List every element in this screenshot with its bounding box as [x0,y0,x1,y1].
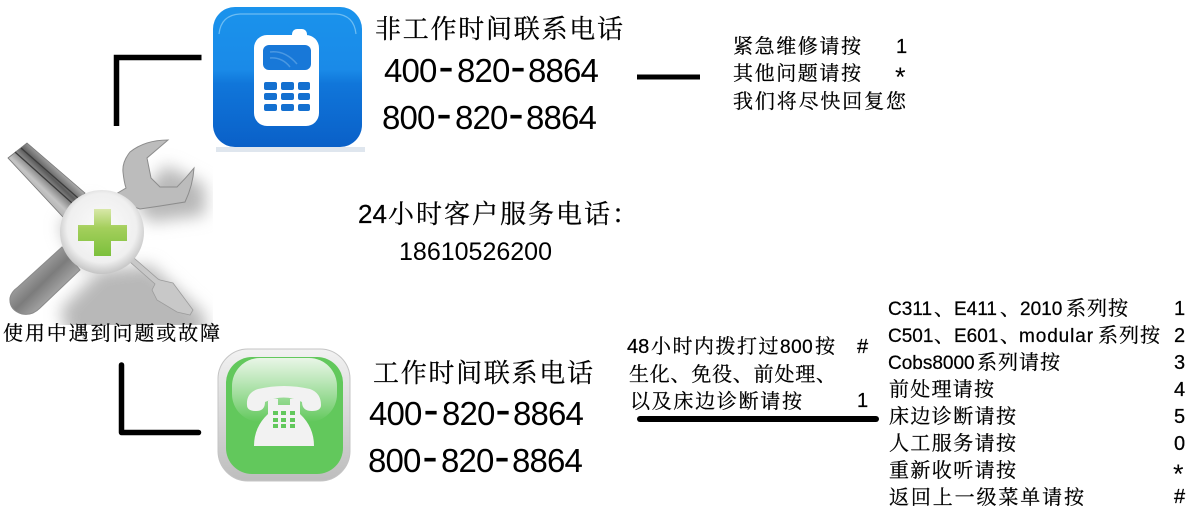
block: working-hours second menu: 、 [1000,325,1020,347]
block: working-hours second menu: 前处理请按 [889,378,995,401]
block: working-hours second menu: modular [1019,326,1094,347]
block: working-hours second menu: 5 [1174,406,1185,428]
block: working-hours first menu [627,335,869,413]
block: working-hours second menu: # [1174,486,1186,508]
block: 24-hour service hotline: 小时客户服务电话： [388,199,640,229]
block: working-hours second menu: 、 [934,298,954,320]
block: working-hours first menu: 小时内拨打过 [651,335,780,358]
block: working-hours second menu: 、 [934,325,954,347]
block: working-hours second menu: E411 [954,299,997,320]
block: working-hours first menu: 按 [815,335,836,358]
block: working-hours second menu: * [1173,459,1184,489]
block: working-hours second menu: C501 [888,326,933,347]
icon: blue mobile phone [213,7,365,152]
block: working-hours second menu: 2010 [1020,299,1062,320]
block: working-hours phone numbers: 800-820-8864 [368,430,583,482]
block: working-hours first menu: 1 [857,390,868,412]
block: after-hours menu: * [895,62,906,92]
block: working-hours second menu [888,297,1186,509]
icon: tools with green plus [8,140,205,340]
connector: bottom-right line [640,416,876,422]
block: working-hours second menu: 1 [1174,298,1185,320]
block: after-hours menu: 我们将尽快回复您 [733,90,907,113]
block: working-hours second menu: 0 [1174,433,1185,455]
block: working-hours second menu: 系列请按 [977,351,1061,374]
block: working-hours second menu: 重新收听请按 [889,459,1017,482]
block: working-hours second menu: 返回上一级菜单请按 [889,486,1085,509]
block: working-hours second menu: 人工服务请按 [889,432,1017,455]
block: after-hours phone numbers: 400-820-8864 [384,40,599,92]
block: working-hours phone numbers: 400-820-8864 [369,383,584,435]
block: after-hours menu [733,35,907,113]
connector: bottom-left elbow [122,365,198,432]
block: working-hours first menu: 48 [627,336,649,358]
block: working-hours first menu: 800 [780,337,813,358]
block: 24-hour service hotline: 18610526200 [399,238,552,266]
block: working-hours first menu: 生化、免役、前处理、 [629,363,836,386]
block: working-hours second menu: 4 [1174,379,1185,401]
block: working-hours first menu: # [857,336,869,358]
block: working-hours second menu: 、 [1000,298,1020,320]
caption: problem or fault: 使用中遇到问题或故障 [3,322,220,345]
block: working-hours phone numbers [368,358,593,482]
block: working-hours second menu: 床边诊断请按 [889,405,1017,428]
block: working-hours second menu: 系列按 [1098,324,1161,347]
block: working-hours first menu: 以及床边诊断请按 [630,390,803,413]
block: 24-hour service hotline: 24 [358,199,387,229]
block: after-hours phone numbers: 800-820-8864 [382,87,597,139]
block: working-hours second menu: E601 [954,326,998,347]
block: after-hours phone numbers [375,14,623,139]
block: after-hours menu: 其他问题请按 [733,62,862,85]
block: working-hours second menu: 2 [1174,325,1185,347]
block: after-hours menu: 1 [896,36,907,58]
block: working-hours second menu: 系列按 [1066,297,1129,320]
connector: top-right line [637,74,700,80]
block: after-hours phone numbers: 非工作时间联系电话 [375,14,623,44]
block: working-hours second menu: C311 [888,299,932,320]
connector: top-left elbow [116,58,202,126]
block: working-hours phone numbers: 工作时间联系电话 [373,358,593,388]
block: working-hours second menu: 3 [1174,352,1185,374]
block: 24-hour service hotline [358,199,640,266]
block: after-hours menu: 紧急维修请按 [733,35,862,58]
icon: green telephone [218,349,350,481]
block: working-hours second menu: Cobs8000 [888,353,975,374]
